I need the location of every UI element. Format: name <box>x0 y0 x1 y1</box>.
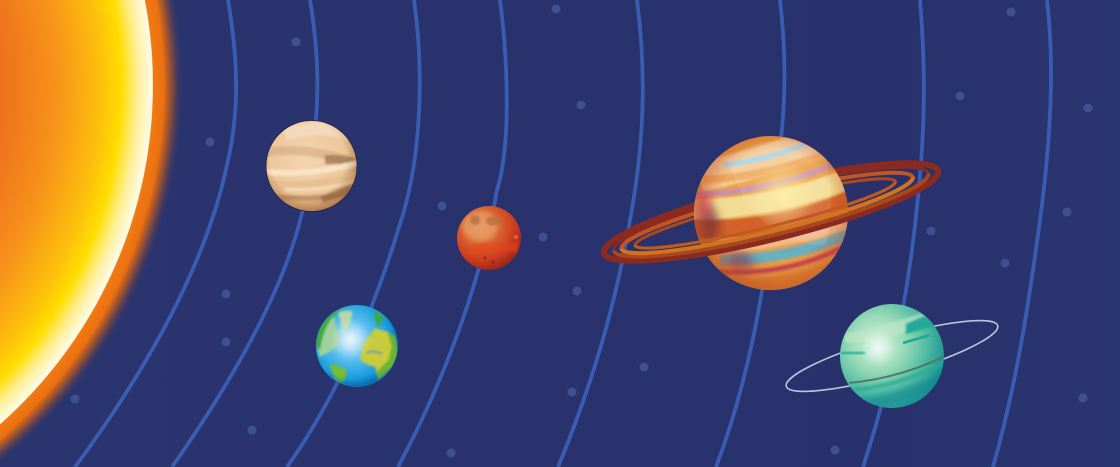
Uranus globe <box>840 304 945 408</box>
continents <box>315 306 399 383</box>
planet: Venus <box>266 120 358 212</box>
planet: Uranus <box>781 304 1003 408</box>
planet: Saturn <box>598 133 944 290</box>
planet: Mars <box>457 206 521 270</box>
Saturn front rings <box>601 171 942 264</box>
Saturn back rings <box>598 145 944 279</box>
Uranus ring <box>781 307 1003 405</box>
planet: Earth <box>316 305 398 387</box>
sun <box>0 0 190 467</box>
Saturn globe <box>690 133 853 290</box>
